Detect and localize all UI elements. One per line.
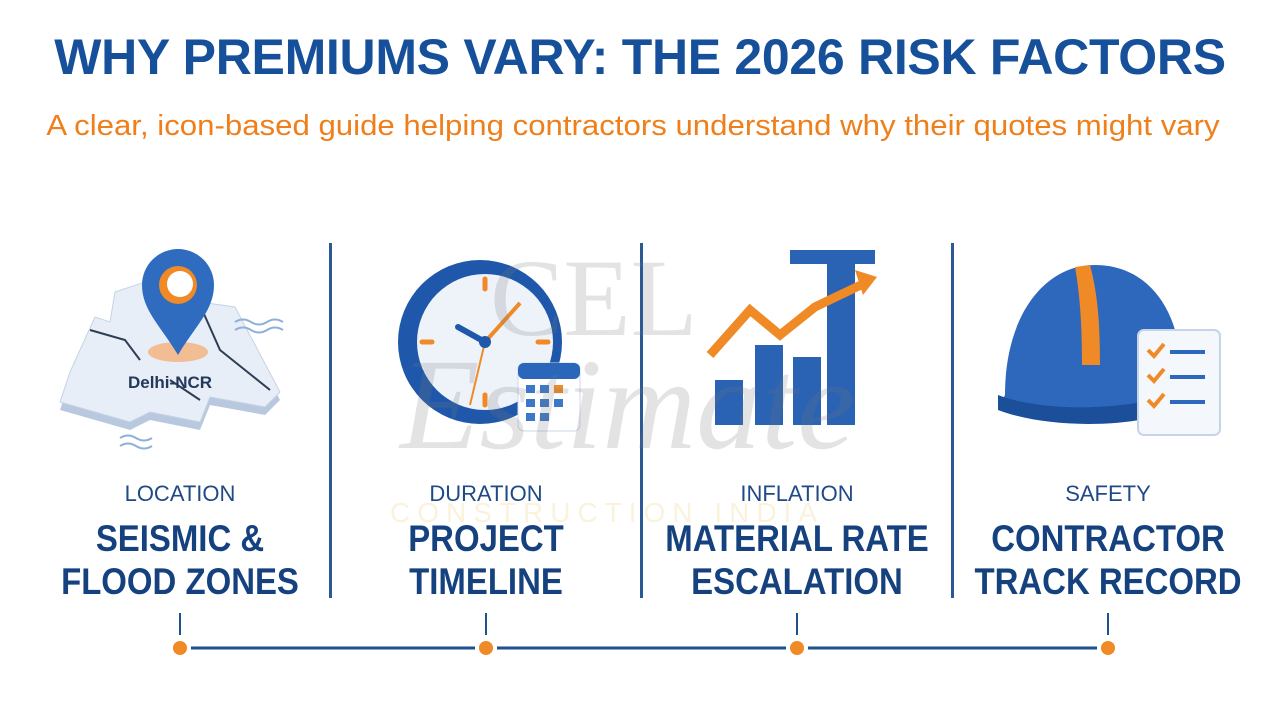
text: CONTRACTOR <box>991 518 1225 559</box>
text: FLOOD ZONES <box>61 561 299 602</box>
text: ESCALATION <box>691 561 903 602</box>
icon: map with location pin <box>60 249 284 450</box>
text: DURATION <box>429 481 543 506</box>
text: TIMELINE <box>409 561 563 602</box>
subtitle: A clear, icon-based guide helping contractors understand why their quotes might vary <box>46 110 1220 142</box>
watermark: CONSTRUCTION INDIA <box>390 497 824 528</box>
text: TRACK RECORD <box>974 561 1242 602</box>
column 2 text <box>408 481 564 602</box>
icon: clock with calendar <box>398 260 580 432</box>
text: SAFETY <box>1065 481 1151 506</box>
watermark <box>390 237 855 528</box>
watermark: CEL <box>490 237 698 359</box>
icon: hard hat with checklist <box>998 265 1221 436</box>
text: LOCATION <box>125 481 235 506</box>
text: MATERIAL RATE <box>665 518 929 559</box>
watermark: Estimate <box>400 333 855 477</box>
timeline <box>173 613 1115 655</box>
icon: rising bar chart <box>706 250 877 425</box>
title: WHY PREMIUMS VARY: THE 2026 RISK FACTORS <box>54 29 1226 85</box>
column 3 text <box>665 481 929 602</box>
icon: map with location pin: Delhi-NCR <box>128 373 212 392</box>
column 1 text <box>61 481 299 602</box>
text: INFLATION <box>740 481 854 506</box>
text: PROJECT <box>408 518 564 559</box>
text: SEISMIC & <box>96 518 264 559</box>
column 4 text <box>974 481 1242 602</box>
